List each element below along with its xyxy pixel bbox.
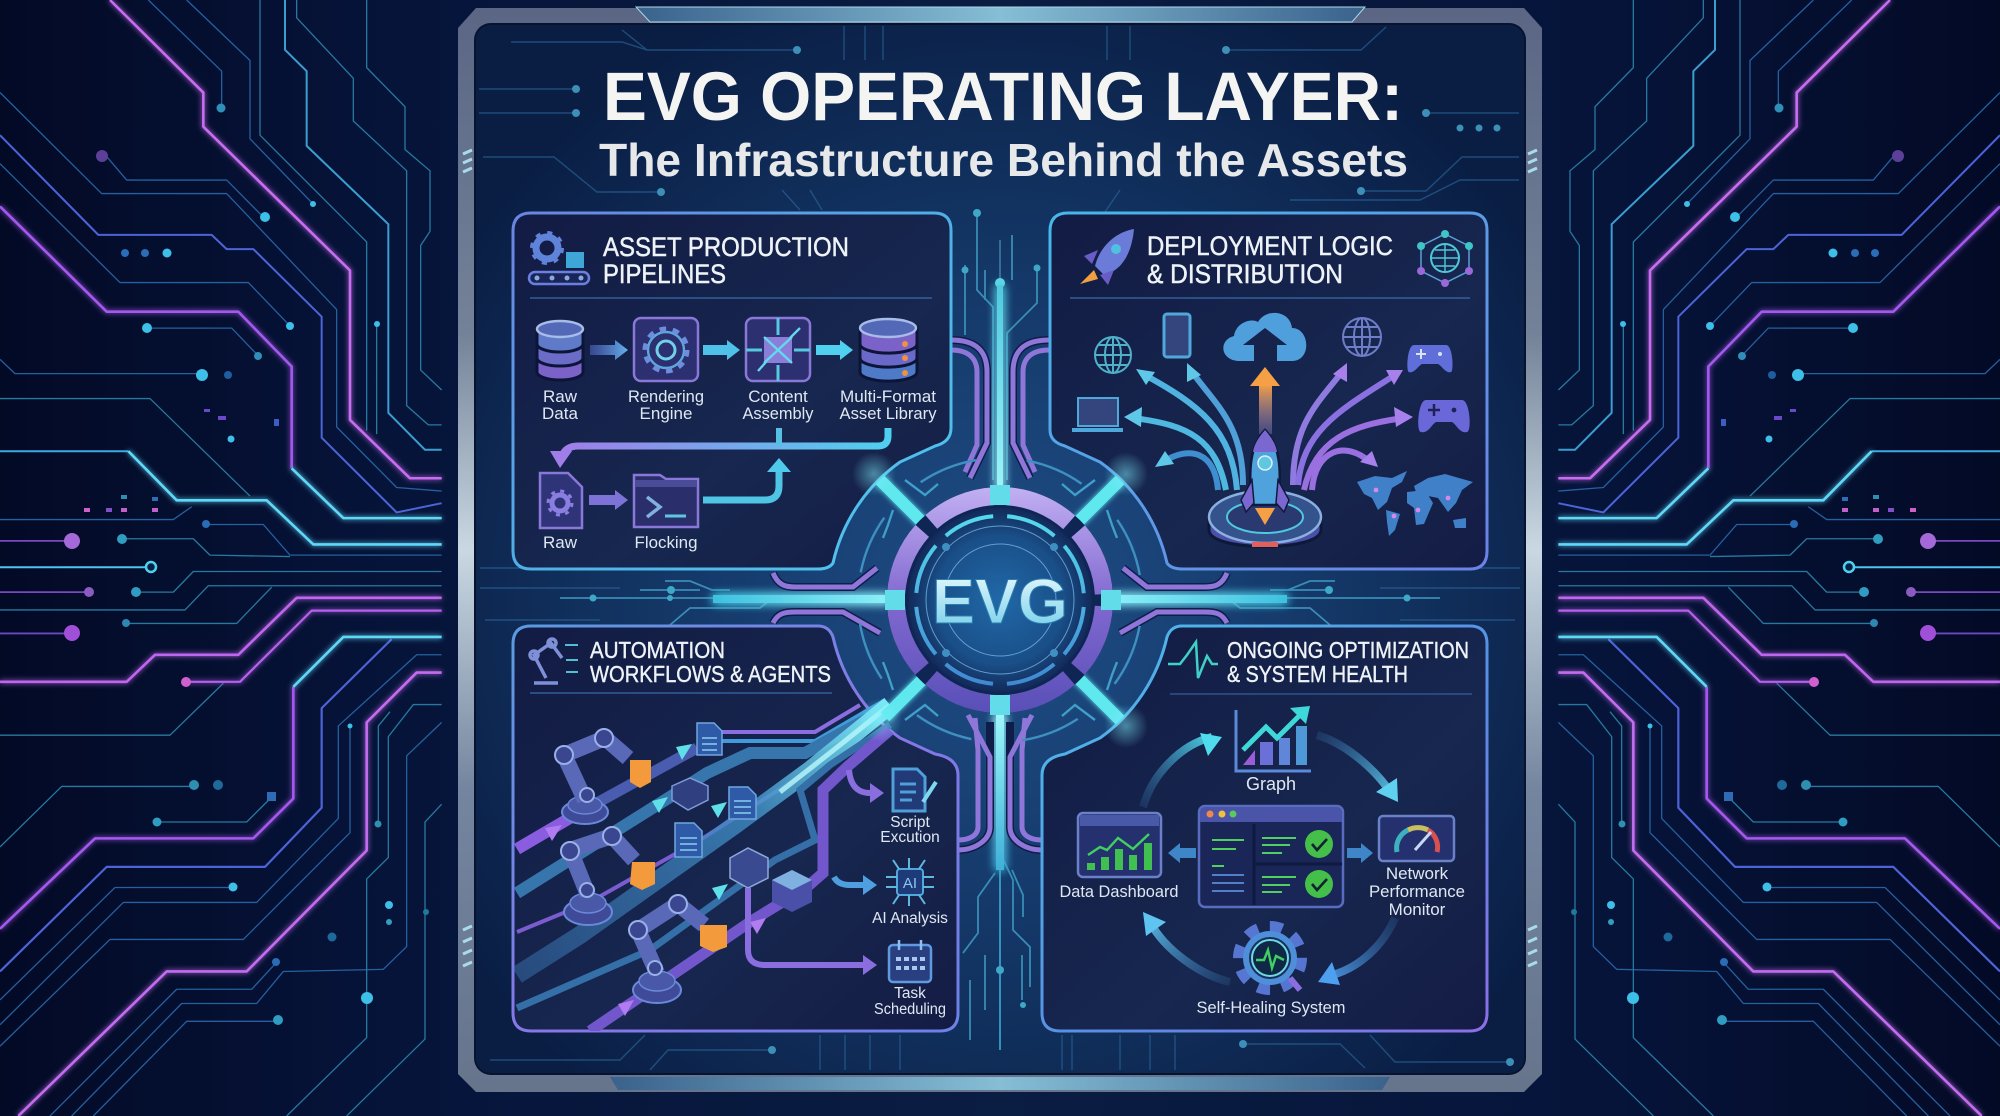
heading: PIPELINES [603,259,726,289]
purple trace pairs [773,340,1227,850]
label: network performance monitor: Performance [1369,882,1465,901]
page title: EVG OPERATING LAYER: [603,58,1403,135]
lower labels [543,533,698,552]
step labels: Engine [640,404,692,423]
icon: world map [1357,471,1473,536]
heading: WORKFLOWS & AGENTS [590,661,831,687]
heading [590,637,831,687]
heading [603,232,849,289]
arrow [703,340,740,360]
cycle arrows [1143,733,1398,985]
panel: ongoing optimization and system health [1042,626,1487,1031]
thin rings [926,526,1074,674]
arrow [589,490,628,510]
icon: robot arm [530,639,578,683]
launch rocket [1241,430,1289,525]
hub node dots [942,543,1058,657]
data cubes [672,778,812,912]
automation labels: Scheduling [874,1001,946,1018]
icon: graph [1236,706,1311,771]
label: network performance monitor: Monitor [1389,900,1446,919]
horizontal bright trunk [713,595,890,603]
workflow output arrows [748,770,884,975]
step labels: Multi-Format [840,387,936,406]
diagonal glowing arms [880,480,1120,720]
circuit traces: left [0,0,442,1116]
automation labels: Excution [880,829,940,846]
hub disc [887,487,1113,713]
page title [599,58,1408,186]
heading: DEPLOYMENT LOGIC [1147,231,1393,261]
icon: pulse [1168,642,1218,678]
vertical bright trunk [997,285,1003,490]
panel: asset production pipelines [513,213,951,569]
automation labels: Task [894,985,926,1002]
heading: ASSET PRODUCTION [603,232,849,262]
central hub [852,452,1148,748]
step labels: Rendering [628,387,704,406]
documents on belts [675,723,756,857]
return connector [550,428,888,468]
inner core [908,508,1092,692]
thin axis circuit traces [560,213,1440,1050]
icon: raw data database [537,321,583,380]
status window [1199,806,1343,907]
robot arm 3 [629,895,727,1003]
icon: rendering engine [634,318,698,381]
central connector traces [560,209,1440,1050]
circuit traces: right [1558,0,2000,1116]
icon: data dashboard [1078,813,1161,877]
icon: cloud upload [1223,313,1306,361]
icon: calendar [889,940,931,982]
outer metal frame [458,7,1542,1092]
orange launch arrow [1250,367,1280,434]
panel outline [513,626,958,1031]
icon: globe right [1343,318,1381,356]
icon: laptop [1072,398,1123,430]
label: self-healing system: Self-Healing System [1196,998,1346,1017]
hub notch arcs [832,432,1168,768]
icon: AI chip [886,858,934,906]
heading: & SYSTEM HEALTH [1227,661,1408,687]
icon: phone [1164,314,1190,357]
frame interior [475,24,1525,1074]
lower labels: Raw [543,533,578,552]
icon: script [893,769,936,811]
arrow [816,340,853,360]
conveyor belts [517,700,890,1031]
heading: AUTOMATION [590,637,725,663]
panel: automation workflows and agents [513,626,958,1031]
heading: & DISTRIBUTION [1147,259,1343,289]
icon: gamepad large [1418,400,1470,432]
icon: network globe [1417,230,1473,287]
step labels: Raw [543,387,578,406]
automation labels [872,814,948,1018]
heading [1147,231,1393,289]
rising connector [703,458,791,500]
label: data dashboard: Data Dashboard [1060,882,1178,901]
lower labels: Flocking [634,533,698,552]
icon: terminal folder [634,475,698,527]
step labels: Asset Library [840,404,937,423]
small side arrows [1168,843,1373,863]
cyan inner ring [916,516,1084,684]
icon: content assembly [746,318,810,381]
panel outline [1050,213,1487,569]
icon: AI chip: AI [903,875,917,892]
icon: self-healing gear [1240,928,1300,990]
step labels: Data [542,404,578,423]
label: network performance monitor [1369,864,1465,919]
panel: deployment logic and distribution [1050,213,1487,569]
icon: gear on conveyor [529,233,589,284]
icon: raw file [540,473,582,528]
launch pad [1209,491,1321,547]
icon: rocket [1080,229,1134,285]
arrow [590,340,628,360]
subtitle: The Infrastructure Behind the Assets [599,134,1408,186]
circuit stubs [883,480,1117,720]
heading: ONGOING OPTIMIZATION [1227,637,1469,663]
robot arm 1 [555,729,651,824]
step labels: Assembly [742,404,814,423]
heading [1227,637,1469,687]
label: graph: Graph [1246,774,1296,794]
EVG logotype: EVG [932,567,1068,637]
faint interior circuit lines [479,26,1520,1070]
frame side stripes [463,150,1537,966]
panel outline [513,213,951,569]
icon: network gauge [1379,816,1454,861]
deployment arrows [1124,363,1413,490]
label: network performance monitor: Network [1386,864,1449,883]
icon: globe left [1095,337,1131,373]
axis caps [885,485,1121,715]
automation labels: Script [890,814,931,831]
bottom bar accent [610,1077,1390,1090]
step labels: Content [748,387,808,406]
robot arm 2 [561,827,655,925]
panel outline [1042,626,1487,1031]
top bar accent [636,7,1365,22]
purple ring segments [896,496,1104,704]
flare spots [852,452,1148,748]
icon: gamepad small [1407,345,1453,372]
icon: asset library database [860,319,917,381]
step labels [542,387,937,423]
automation labels: AI Analysis [872,910,948,927]
